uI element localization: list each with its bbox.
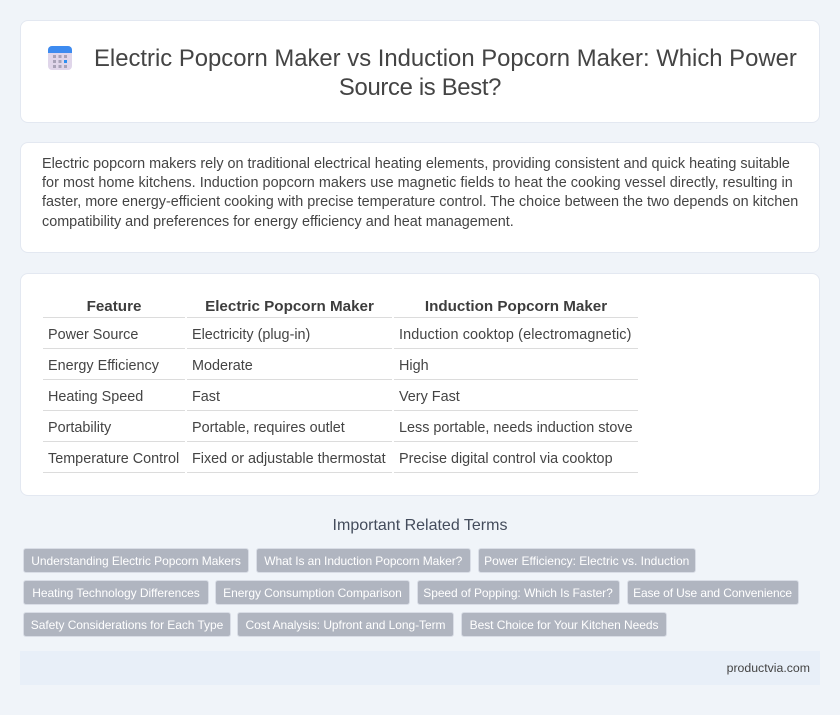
related term tags: Best Choice for Your Kitchen Needs [470,618,658,632]
related term tags: Heating Technology Differences [32,586,200,600]
footer credit: productvia.com [727,661,810,675]
comparison table: Moderate [192,358,253,374]
intro paragraph: Electric popcorn makers rely on traditional electrical heating elements, providing consistent and quick heating suitable [42,156,790,172]
footer bar [20,651,820,685]
comparison table: Temperature Control [48,451,179,467]
panel: comparison table [20,273,820,496]
related term tags: What Is an Induction Popcorn Maker? [264,554,462,568]
comparison table: High [399,358,429,374]
comparison table: Electricity (plug-in) [192,327,310,343]
comparison table: Induction cooktop (electromagnetic) [399,327,632,343]
intro paragraph: for most home kitchens. Induction popcorn makers use magnetic fields to heat the cooking vessel directly, resulting in [42,175,793,191]
comparison table: Energy Efficiency [48,358,159,374]
intro paragraph: compatibility and preferences for energy efficiency and heat management. [42,214,514,230]
panel: title card [20,20,820,123]
comparison table: Feature [87,298,141,315]
title [94,45,797,101]
title: Source is Best? [339,74,501,101]
related term tags: Cost Analysis: Upfront and Long-Term [246,618,445,632]
intro paragraph [42,156,798,230]
comparison table: Precise digital control via cooktop [399,451,613,467]
related term tags [23,548,799,637]
comparison table: Power Source [48,327,138,343]
comparison table: Heating Speed [48,389,143,405]
panel: intro text [20,142,820,253]
comparison table: Fixed or adjustable thermostat [192,451,386,467]
comparison table: Fast [192,389,220,405]
comparison table: Induction Popcorn Maker [425,298,607,315]
comparison table: Electric Popcorn Maker [205,298,374,315]
related term tags: Safety Considerations for Each Type [31,618,223,632]
comparison table: Very Fast [399,389,460,405]
related term tags: Power Efficiency: Electric vs. Induction [484,554,689,568]
comparison table: Less portable, needs induction stove [399,420,633,436]
intro paragraph: faster, more energy-efficient cooking with precise temperature control. The choice between the two depends on kitchen [42,194,798,210]
comparison table: Portable, requires outlet [192,420,345,436]
related term tags: Energy Consumption Comparison [223,586,402,600]
icon: calendar [48,46,72,70]
related term tags: Speed of Popping: Which Is Faster? [423,586,613,600]
comparison table [43,298,638,473]
title: Electric Popcorn Maker vs Induction Popcorn Maker: Which Power [94,45,797,72]
related term tags: Ease of Use and Convenience [633,586,792,600]
related term tags: Understanding Electric Popcorn Makers [31,554,241,568]
comparison table: Portability [48,420,111,436]
heading: related terms: Important Related Terms [333,517,507,534]
